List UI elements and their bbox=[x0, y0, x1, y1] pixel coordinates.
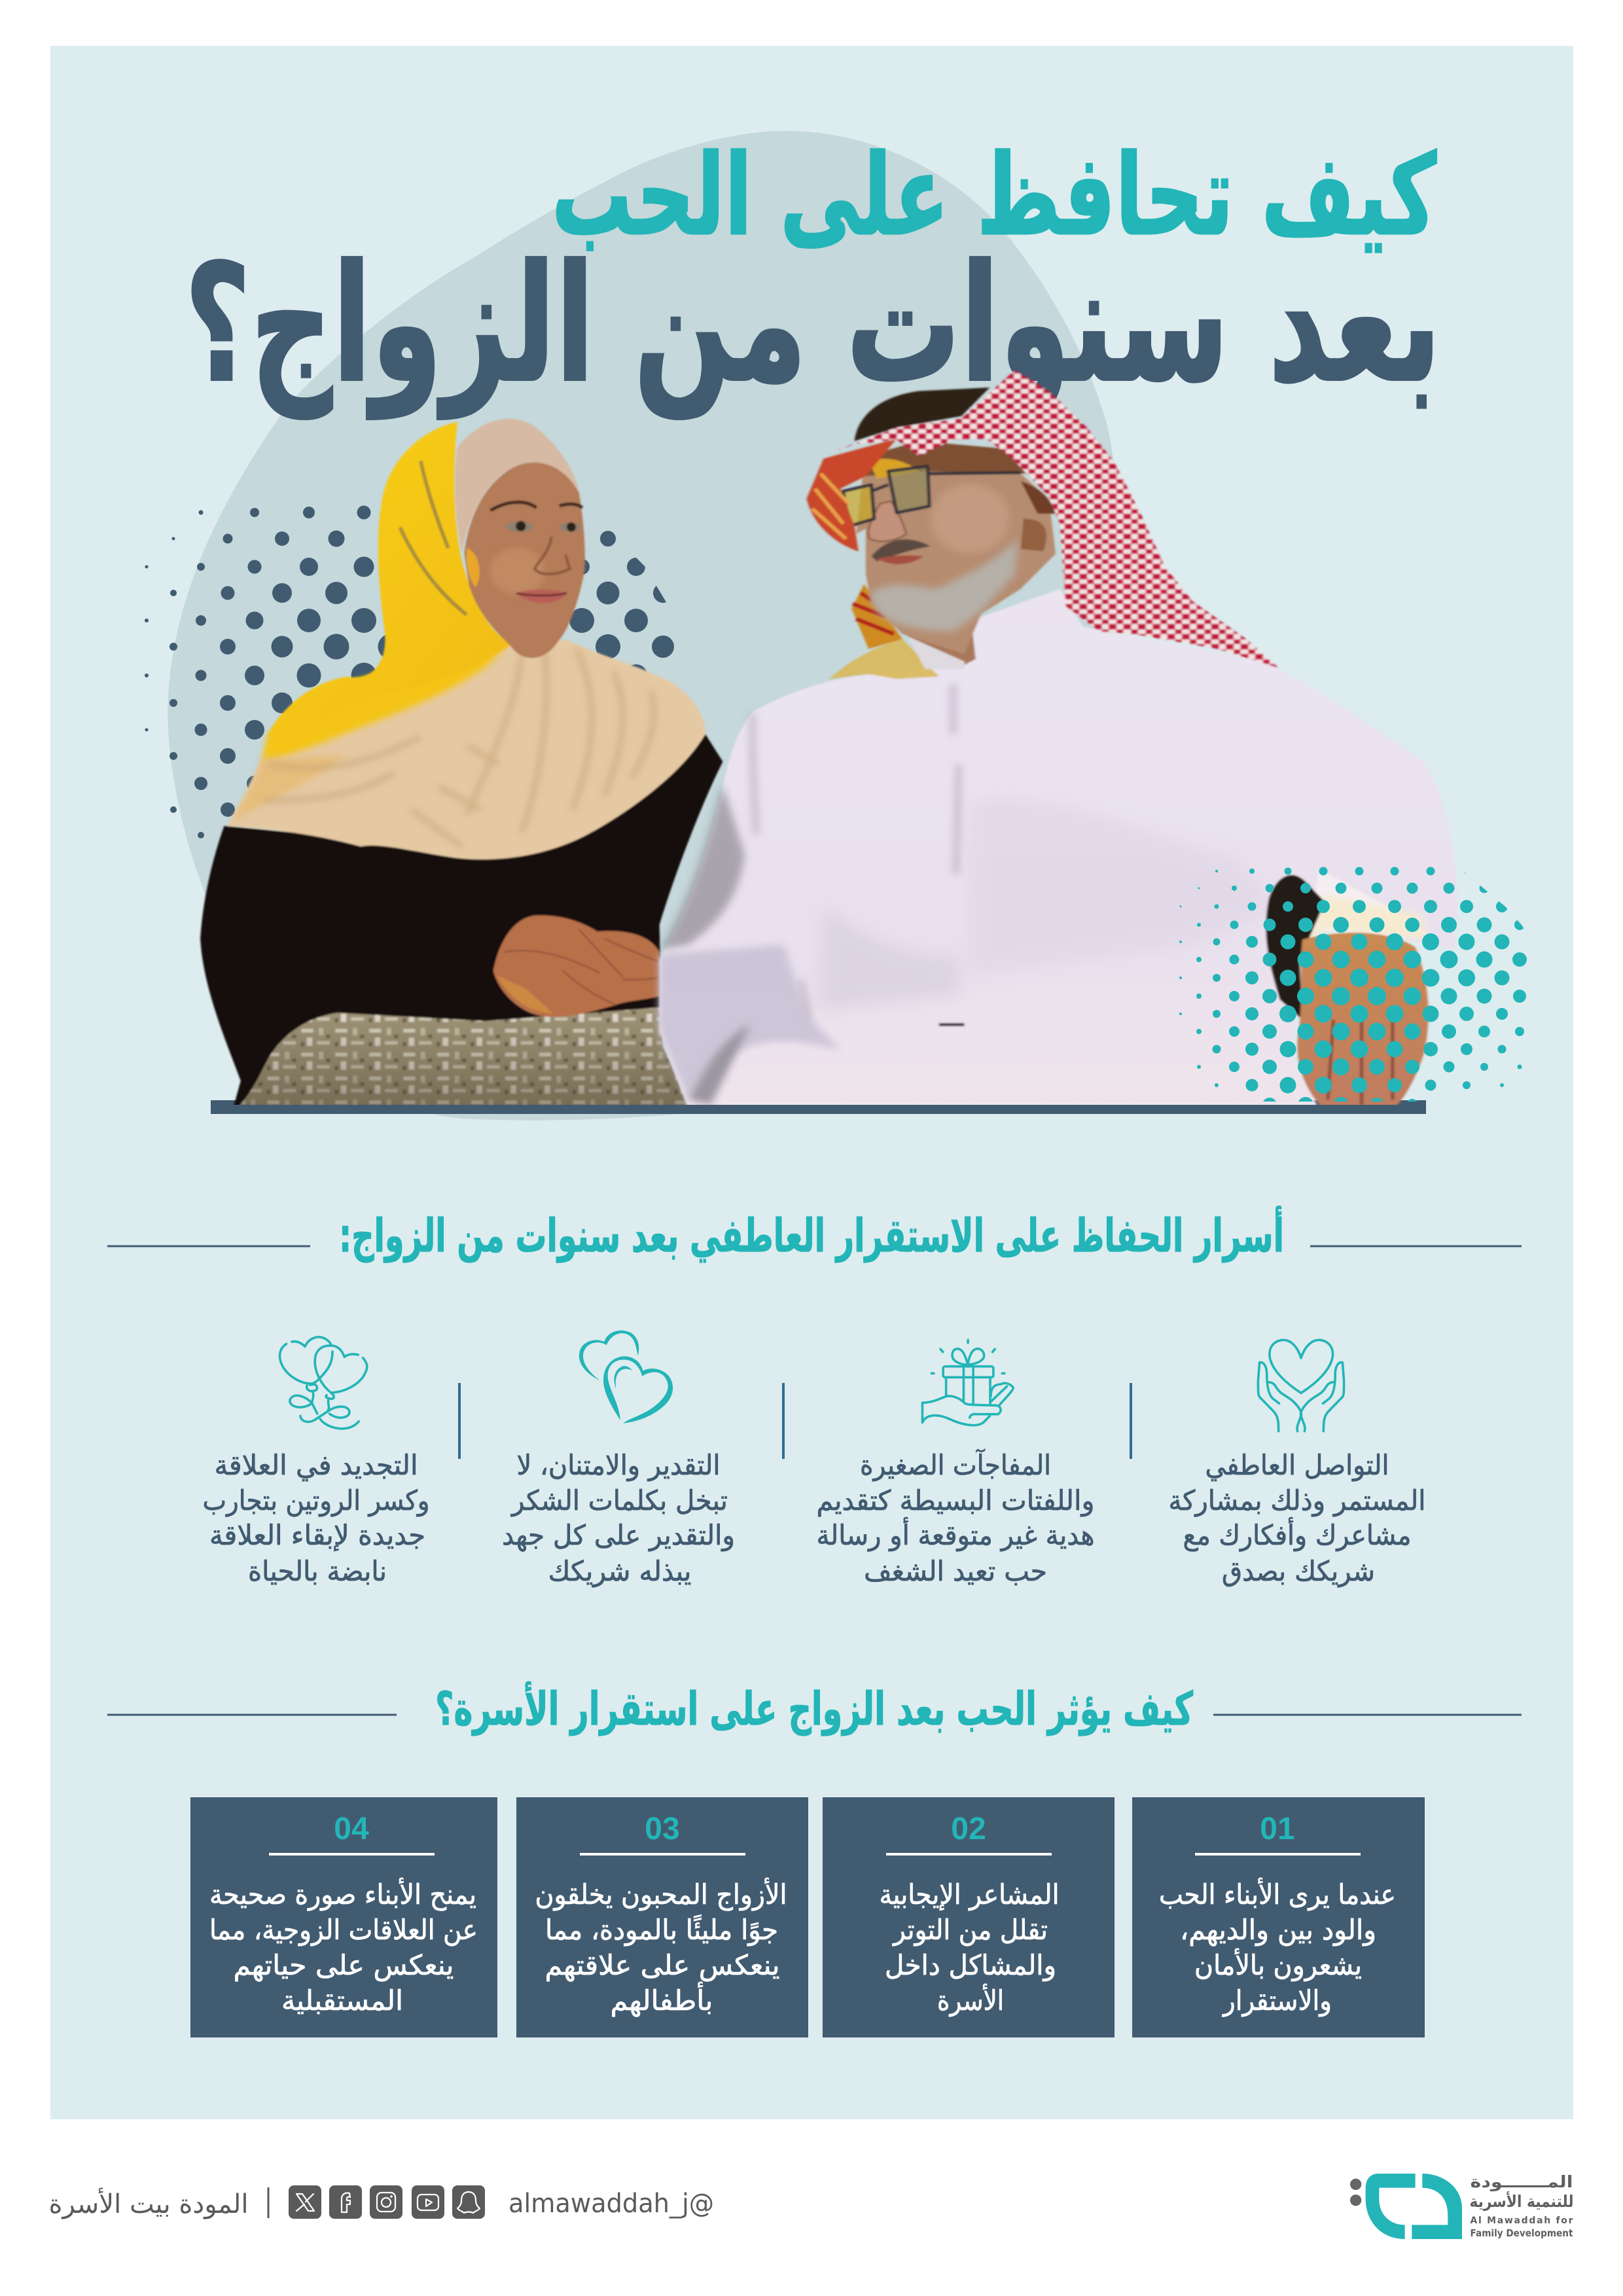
text: renewal bbox=[203, 1449, 429, 1587]
hijab yellow streak bbox=[262, 647, 506, 762]
card 03 bbox=[516, 1797, 808, 2037]
text: emotional communication: مشاعرك وأفكارك مع bbox=[1183, 1517, 1411, 1552]
footer logo bbox=[1350, 2172, 1573, 2239]
woman hands bbox=[493, 916, 660, 1017]
thobe shading bbox=[659, 684, 1427, 1105]
feature: small surprises bbox=[817, 1340, 1094, 1587]
card 04 text: يمنح الأبناء صورة صحيحة bbox=[209, 1877, 476, 1911]
card 04 bbox=[190, 1797, 497, 2037]
decorative blob behind the couple bbox=[168, 131, 1118, 1121]
icon: gift on hand bbox=[922, 1340, 1013, 1426]
card 04 text: ينعكس على حياتهم bbox=[233, 1949, 454, 1982]
icon: X bbox=[289, 2185, 321, 2219]
card 01 text: والود بين والديهم، bbox=[1180, 1914, 1376, 1946]
man neck and collar bbox=[902, 609, 976, 665]
text: small surprises: حب تعيد الشغف bbox=[864, 1555, 1047, 1587]
woman cushion bbox=[235, 1007, 692, 1111]
icon: snapchat bbox=[452, 2185, 485, 2219]
card 04 text bbox=[209, 1877, 478, 2017]
text: appreciation: والتقدير على كل جهد bbox=[502, 1519, 735, 1552]
feature: emotional communication bbox=[1169, 1340, 1425, 1587]
text: small surprises bbox=[817, 1448, 1094, 1587]
text: small surprises: واللفتات البسيطة كتقديم bbox=[817, 1484, 1094, 1517]
logo mark bbox=[1350, 2174, 1462, 2239]
title bbox=[185, 131, 1441, 420]
text: emotional communication: شريكك بصدق bbox=[1222, 1555, 1375, 1587]
man ghutra bbox=[823, 370, 1279, 668]
nose bbox=[868, 501, 906, 541]
social handle: almawaddah_j@ bbox=[508, 2189, 714, 2219]
card 02 text: والمشاكل داخل bbox=[885, 1949, 1056, 1981]
card 02 text: الأسرة bbox=[937, 1983, 1004, 2017]
feature: renewal bbox=[203, 1337, 429, 1587]
teal halftone dots bbox=[1179, 867, 1527, 1113]
icon: youtube bbox=[412, 2185, 444, 2219]
number 03: 03 bbox=[645, 1812, 680, 1846]
icon: two hearts bbox=[579, 1331, 673, 1424]
man glasses bbox=[843, 466, 1021, 526]
red lower scarf bbox=[851, 584, 902, 649]
logo wordmark: المـــــــودة bbox=[1470, 2172, 1573, 2192]
man face bbox=[856, 441, 1056, 654]
card 02 text bbox=[880, 1878, 1059, 2017]
heading text: section 2: كيف يؤثر الحب بعد الزواج على استقرار الأسرة؟ bbox=[435, 1681, 1193, 1736]
card 01 text: يشعرون بالأمان bbox=[1194, 1948, 1362, 1981]
hijab lower left tint bbox=[232, 755, 348, 821]
card 01 bbox=[1132, 1797, 1425, 2037]
icon: instagram bbox=[370, 2185, 402, 2219]
footer slogan: المودة بيت الأسرة bbox=[48, 2187, 249, 2219]
logo wordmark bbox=[1470, 2172, 1573, 2239]
number 01: 01 bbox=[1260, 1812, 1295, 1846]
card 04 text: المستقبلية bbox=[281, 1984, 403, 2017]
ghutra side fold bbox=[806, 439, 897, 551]
card 02 text: المشاعر الإيجابية bbox=[880, 1878, 1059, 1910]
text: emotional communication: التواصل العاطفي bbox=[1205, 1449, 1389, 1482]
feature column dividers bbox=[459, 1383, 1131, 1459]
navy halftone dots bbox=[145, 505, 674, 838]
card 02 bbox=[823, 1797, 1115, 2037]
man arm gap bbox=[1266, 875, 1325, 1020]
text: appreciation: يبذله شريكك bbox=[548, 1555, 691, 1587]
text: small surprises: المفاجآت الصغيرة bbox=[860, 1448, 1051, 1481]
man hand bbox=[1297, 933, 1429, 1110]
logo wordmark: Al Mawaddah for bbox=[1470, 2215, 1573, 2226]
woman black abaya bbox=[200, 734, 722, 1111]
beard bbox=[870, 539, 1018, 632]
woman bbox=[200, 419, 722, 1111]
hijab folds bbox=[264, 649, 654, 846]
text: small surprises: هدية غير متوقعة أو رسالة bbox=[817, 1517, 1094, 1551]
base bar under the couple bbox=[211, 1100, 1426, 1114]
card 03 text bbox=[535, 1877, 787, 2017]
icon: heart balloons bbox=[280, 1337, 367, 1429]
man cap bbox=[855, 387, 990, 441]
feature: appreciation bbox=[502, 1331, 735, 1587]
text: renewal: وكسر الروتين بتجارب bbox=[203, 1484, 429, 1516]
card 04 text: عن العلاقات الزوجية، مما bbox=[209, 1914, 478, 1946]
text: renewal: التجديد في العلاقة bbox=[215, 1449, 418, 1482]
number 02: 02 bbox=[951, 1812, 986, 1846]
card 03 text: جوًا مليئًا بالمودة، مما bbox=[545, 1914, 778, 1946]
text: appreciation: تبخل بكلمات الشكر bbox=[510, 1484, 728, 1516]
photo: couple bbox=[200, 370, 1457, 1111]
number 04: 04 bbox=[334, 1812, 369, 1846]
text: renewal: جديدة لإبقاء العلاقة bbox=[209, 1519, 425, 1551]
man thobe bbox=[659, 589, 1457, 1110]
text: renewal: نابضة بالحياة bbox=[248, 1555, 387, 1587]
icon: facebook bbox=[329, 2185, 362, 2219]
card 03 text: ينعكس على علاقتهم bbox=[544, 1949, 780, 1982]
woman hijab cape bbox=[227, 640, 705, 859]
yellow drape at collar bbox=[829, 639, 939, 679]
footer: slogan and social bbox=[48, 2185, 714, 2219]
man bbox=[659, 370, 1457, 1110]
card 01 text: والاستقرار bbox=[1222, 1984, 1332, 2017]
text: appreciation: التقدير والامتنان، لا bbox=[517, 1449, 720, 1481]
text: emotional communication bbox=[1169, 1449, 1425, 1587]
woman face bbox=[464, 463, 585, 658]
text: appreciation bbox=[502, 1449, 735, 1587]
card 03 text: بأطفالهم bbox=[610, 1981, 713, 2017]
icon: hands holding heart bbox=[1258, 1340, 1344, 1431]
logo wordmark: للتنمية الأسرية bbox=[1470, 2191, 1573, 2212]
text: emotional communication: المستمر وذلك بمشاركة bbox=[1169, 1484, 1425, 1516]
beige hood bbox=[455, 419, 579, 552]
card 02 text: تقلل من التوتر bbox=[892, 1914, 1048, 1946]
yellow hood bbox=[267, 422, 512, 736]
card 01 text bbox=[1159, 1877, 1396, 2017]
card 03 text: الأزواج المحبون يخلقون bbox=[535, 1877, 787, 1910]
logo wordmark: Family Development bbox=[1470, 2227, 1573, 2239]
card 01 text: عندما يرى الأبناء الحب bbox=[1159, 1877, 1396, 1910]
